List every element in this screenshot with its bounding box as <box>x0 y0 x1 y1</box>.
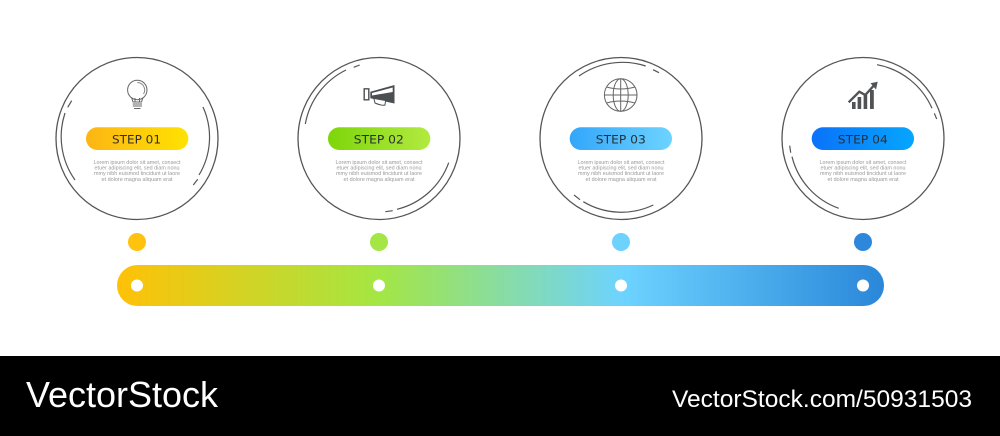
inner arcs <box>790 65 937 208</box>
inner arcs <box>574 62 659 212</box>
icon: light bulb <box>128 80 147 108</box>
panel: step 01 <box>56 58 218 220</box>
body text: et dolore magna aliquam erat <box>102 177 173 183</box>
circle outline <box>298 58 460 220</box>
timeline gradient bar <box>117 265 884 306</box>
timeline marker dots <box>128 233 872 251</box>
circle outline <box>782 58 944 220</box>
body text: et dolore magna aliquam erat <box>828 177 899 183</box>
icon: growth chart <box>849 82 878 109</box>
step label: STEP 02 <box>354 132 404 146</box>
circle outline <box>540 58 702 220</box>
icon: megaphone <box>364 85 394 105</box>
body text <box>578 160 665 183</box>
inner arcs <box>61 101 210 185</box>
footer band <box>0 356 1000 436</box>
step label pill <box>328 127 430 150</box>
body text <box>336 160 423 183</box>
body text <box>820 160 907 183</box>
body text: mmy nibh euismod tincidunt ut laore <box>578 171 664 177</box>
step label pill <box>86 127 188 150</box>
panel: step 04 <box>782 58 944 220</box>
body text: etuer adipiscing elit, sed diam nonu <box>94 166 180 172</box>
body text: Lorem ipsum dolor sit amet, consect <box>820 160 907 166</box>
inner arcs <box>305 65 449 212</box>
panel: step 03 <box>540 58 702 220</box>
body text: etuer adipiscing elit, sed diam nonu <box>336 166 422 172</box>
panel: step 02 <box>298 58 460 220</box>
body text: et dolore magna aliquam erat <box>344 177 415 183</box>
body text: mmy nibh euismod tincidunt ut laore <box>94 171 180 177</box>
step label pill <box>570 127 672 150</box>
footer logo text: VectorStock <box>26 374 219 415</box>
body text <box>94 160 181 183</box>
body text: etuer adipiscing elit, sed diam nonu <box>820 166 906 172</box>
body text: et dolore magna aliquam erat <box>586 177 657 183</box>
circle outline <box>56 58 218 220</box>
step label: STEP 01 <box>112 132 161 146</box>
body text: etuer adipiscing elit, sed diam nonu <box>578 166 664 172</box>
icon: globe <box>604 79 637 111</box>
step label: STEP 03 <box>596 132 646 146</box>
body text: mmy nibh euismod tincidunt ut laore <box>820 171 906 177</box>
body text: Lorem ipsum dolor sit amet, consect <box>578 160 665 166</box>
step label: STEP 04 <box>838 132 888 146</box>
body text: Lorem ipsum dolor sit amet, consect <box>94 160 181 166</box>
footer url text: VectorStock.com/50931503 <box>672 386 972 413</box>
step label pill <box>812 127 914 150</box>
body text: mmy nibh euismod tincidunt ut laore <box>336 171 422 177</box>
body text: Lorem ipsum dolor sit amet, consect <box>336 160 423 166</box>
